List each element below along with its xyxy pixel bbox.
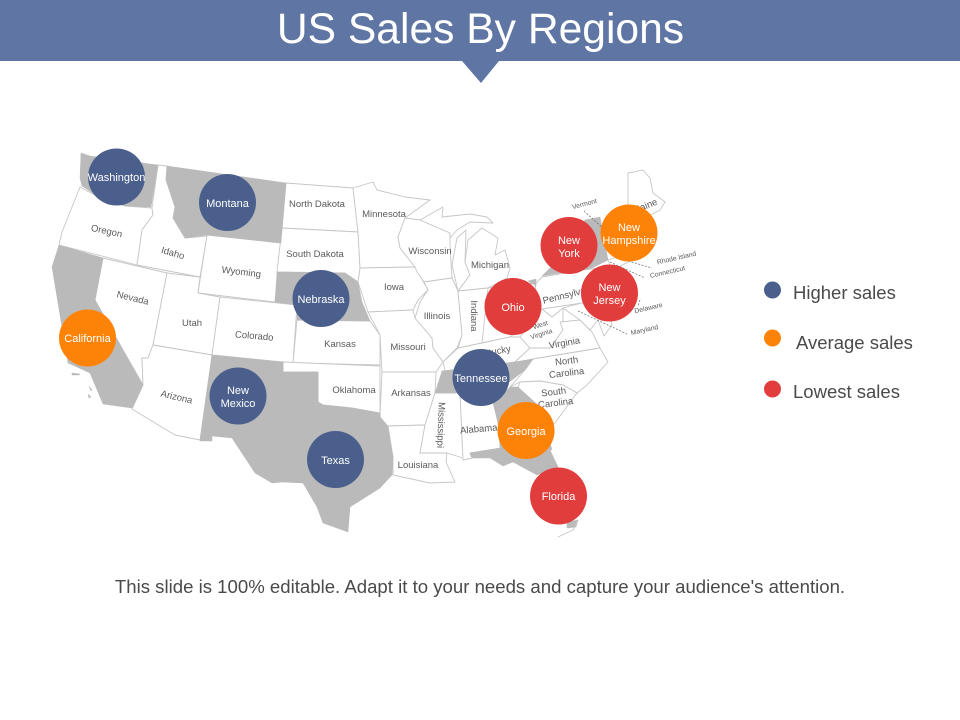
state name labels: Illinois (424, 311, 450, 322)
marker: Washington (88, 148, 145, 206)
marker: Ohio: Ohio (501, 302, 525, 314)
Florida tip and California islands (72, 373, 578, 537)
state name labels: Connecticut (649, 265, 686, 280)
legend (764, 282, 913, 402)
marker: California (59, 310, 116, 366)
state name labels: Louisiana (398, 460, 439, 471)
marker: Tennessee: Tennessee (454, 373, 508, 385)
marker: New Hampshire: New (618, 222, 640, 234)
state name labels: Kentucky (471, 344, 512, 361)
state name labels: Maryland (630, 324, 659, 337)
state name labels: Wisconsin (408, 246, 452, 257)
unshaded states (59, 165, 665, 483)
state name labels: West (532, 320, 549, 331)
state name labels: South (541, 386, 567, 399)
leader lines for small states (578, 211, 652, 334)
US map (52, 153, 697, 537)
state name labels: Oregon (90, 223, 123, 240)
marker: Florida: Florida (542, 491, 576, 503)
marker: New Mexico: New (227, 385, 249, 397)
state name labels: Michigan (471, 260, 509, 271)
marker: Montana (199, 174, 256, 231)
state name labels (90, 197, 697, 471)
shaded states (52, 153, 608, 532)
state name labels: Colorado (235, 329, 274, 344)
state name labels: Indiana (468, 300, 479, 332)
title: US Sales By Regions (277, 5, 684, 53)
marker: Georgia: Georgia (506, 426, 546, 438)
marker: New York (540, 217, 598, 274)
state name labels: Virginia (530, 328, 554, 341)
state name labels: North Dakota (289, 199, 346, 210)
marker: Washington: Washington (88, 172, 145, 184)
state name labels: Carolina (537, 396, 575, 411)
state name labels: Oklahoma (332, 385, 376, 396)
state name labels: Mississippi (434, 402, 447, 448)
state name labels: Arizona (160, 389, 194, 407)
marker: New Hampshire: Hampshire (602, 235, 656, 247)
state name labels: Virginia (548, 335, 582, 352)
state name labels: Carolina (548, 366, 586, 381)
marker: Ohio (484, 278, 542, 335)
marker: New Jersey: Jersey (593, 295, 626, 307)
state name labels: Wyoming (221, 265, 262, 280)
state name labels: Vermont (571, 198, 598, 211)
state name labels: Missouri (390, 342, 426, 353)
marker: New Mexico: Mexico (221, 398, 255, 410)
marker: New Jersey (581, 264, 638, 322)
state name labels: Rhode Island (656, 251, 697, 266)
marker: New Jersey: New (598, 282, 621, 294)
marker: New Hampshire (600, 204, 658, 262)
footer caption: This slide is 100% editable. Adapt it to your needs and capture your audience's attention. (115, 576, 845, 597)
state name labels: Pennsylvania (542, 282, 600, 307)
state name labels: Nevada (115, 289, 151, 308)
state name labels: Delaware (634, 302, 664, 315)
state name labels: North (554, 355, 579, 368)
state name labels: South Dakota (286, 249, 344, 260)
state name labels: Idaho (160, 245, 186, 262)
legend: average sales: Average sales (796, 332, 913, 353)
marker: Nebraska (292, 270, 350, 327)
marker: California: California (64, 333, 112, 345)
state name labels: Alabama (460, 422, 499, 437)
state name labels: Kansas (324, 339, 356, 350)
header banner (0, 0, 960, 83)
marker: Texas (307, 431, 364, 488)
legend: higher sales: Higher sales (793, 282, 896, 303)
marker: New Mexico (210, 368, 266, 424)
marker: New York: New (558, 235, 580, 247)
marker: Florida (530, 468, 587, 524)
marker: Nebraska: Nebraska (297, 294, 345, 306)
state name labels: Minnesota (362, 209, 407, 220)
marker: Texas: Texas (321, 455, 350, 467)
state name labels: Maine (631, 197, 659, 217)
legend: lowest sales: Lowest sales (793, 381, 900, 402)
marker: Georgia (498, 402, 554, 459)
marker: New York: York (558, 248, 580, 260)
state name labels: Utah (182, 318, 202, 329)
state name labels: Arkansas (391, 388, 431, 399)
marker: Tennessee (452, 349, 510, 406)
marker: Montana: Montana (206, 198, 250, 210)
state name labels: Iowa (384, 282, 405, 293)
